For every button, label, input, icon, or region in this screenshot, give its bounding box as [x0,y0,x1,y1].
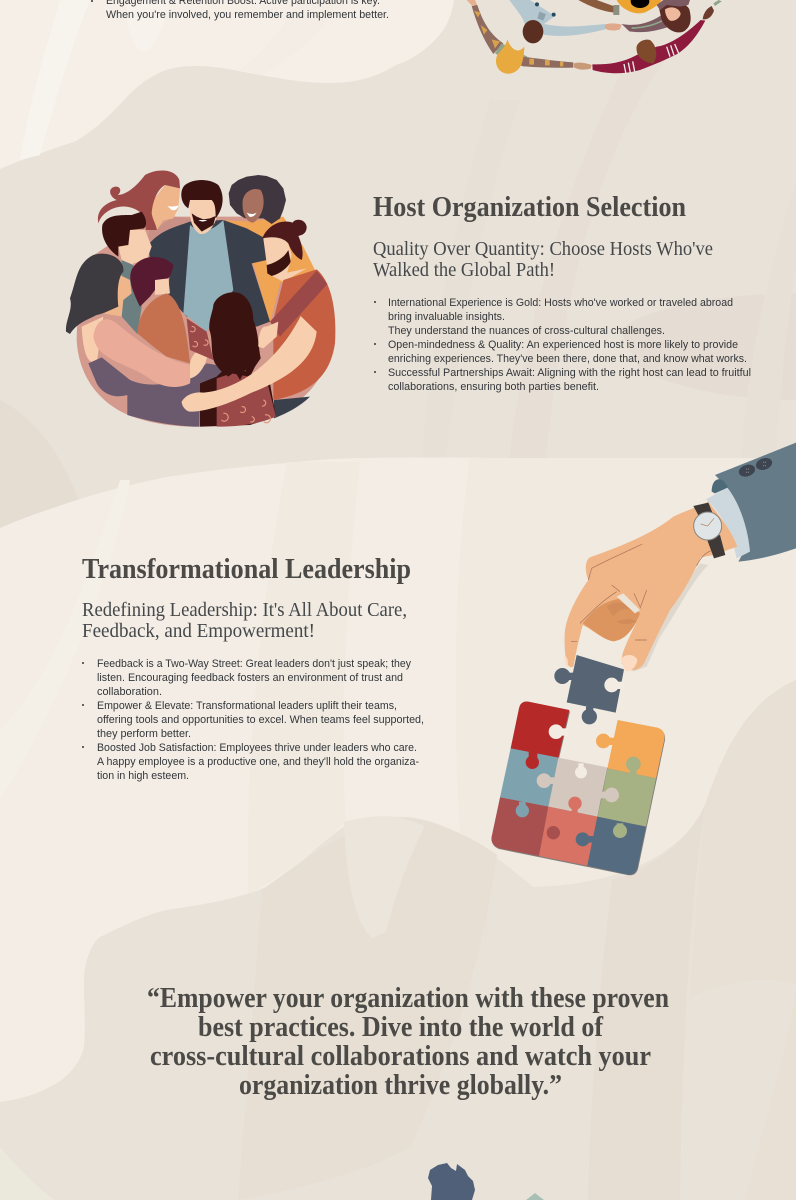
leadership sub-heading: Feedback, and Empowerment! [82,620,315,642]
host bullet list [374,297,751,393]
leadership bullet list: A happy employee is a productive one, and they'll hold the organiza- [97,756,419,768]
leadership bullet list: Boosted Job Satisfaction: Employees thrive under leaders who care. [97,742,417,754]
suit sleeve [715,443,796,562]
person in light blue shirt [509,0,622,43]
bottom figure: blue hair silhouette [428,1163,475,1200]
leadership bullet list: they perform better. [97,728,191,740]
bottom figure: sage hair silhouette [526,1193,544,1200]
woman with auburn hair [98,170,192,250]
lifted slate piece [554,655,624,724]
hand shadow [627,563,708,672]
green piece [597,768,656,827]
illustration: puzzle [491,655,665,875]
top section tail of bullet text: When you're involved, you remember and implement better. [106,9,389,21]
leadership bullet list: tion in high esteem. [97,770,189,782]
piece shadow [492,704,665,875]
closing quote: best practices. Dive into the world of [198,1012,604,1043]
puzzle notches [549,724,587,778]
illustration: hand placing a puzzle piece [564,443,796,672]
patterned skirt [187,318,213,360]
leadership heading: Transformational Leadership [82,553,411,585]
top section tail of bullet text [91,0,389,21]
leadership sub-heading: Redefining Leadership: It's All About Care, [82,599,407,621]
fingernails [621,655,637,671]
host sub-heading: Walked the Global Path! [373,259,555,281]
boy in profile [102,212,152,334]
host bullet list: Successful Partnerships Await: Aligning with the right host can lead to fruitful [388,367,751,379]
taupe piece [548,758,607,817]
woman with maroon hair and rust top [130,257,190,363]
hand and fingers [565,502,737,670]
shirt cuff [706,488,750,558]
maroon piece [491,797,548,856]
sleeve buttons [737,456,774,479]
lower beige blob [0,680,796,1200]
woman with long dark hair and patterned dress [200,292,276,427]
leadership bullet list: collaboration. [97,686,162,698]
leadership bullet list: Empower & Elevate: Transformational leaders uplift their teams, [97,700,397,712]
leadership bullet list: offering tools and opportunities to excel. When teams feel supported, [97,714,424,726]
light wedge [344,816,425,938]
host bullet list: Open-mindedness & Quality: An experienced host is more likely to provide [388,339,738,351]
curly hair woman [229,175,286,224]
illustration: people holding hands in a circle, seen from above [467,0,722,74]
person in patterned sleeves with blond hair [467,0,592,74]
orange sweater [220,217,315,323]
closing quote [147,983,669,1101]
leadership bullet list: Feedback is a Two-Way Street: Great leaders don't just speak; they [97,658,411,670]
host sub-heading [373,238,713,281]
host bullet list: collaborations, ensuring both parties benefit. [388,381,599,393]
arm hugging across the front [182,316,317,412]
host bullet list: bring invaluable insights. [388,311,505,323]
hand crease lines [571,544,711,641]
woman with dark wavy hair, pink top and friend's purple shirt [66,254,227,427]
leadership bullet list [82,658,424,782]
orange piece [607,720,665,778]
slate piece [587,817,646,875]
center man [148,180,270,332]
person in burgundy sweater [592,0,722,74]
man with top knot [262,220,335,418]
host heading: Host Organization Selection [373,191,686,223]
person in yellow [578,0,662,15]
host sub-heading: Quality Over Quantity: Choose Hosts Who've [373,238,713,260]
hand on shoulder [258,322,278,348]
coral piece [539,807,597,866]
woman in striped sweater [622,0,691,32]
red piece [511,702,569,758]
top-left cream blob [0,0,454,169]
closing quote: “Empower your organization with these proven [147,983,669,1014]
leadership bullet list: listen. Encouraging feedback fosters an environment of trust and [97,672,403,684]
host bullet list: They understand the nuances of cross-cultural challenges. [388,325,665,337]
teal piece [500,748,558,807]
middle cream band [0,458,796,1102]
back blob [77,217,333,427]
leadership sub-heading [82,599,407,642]
host bullet list: enriching experiences. They've been there, done that, and know what works. [388,353,747,365]
host bullet list: International Experience is Gold: Hosts who've worked or traveled abroad [388,297,733,309]
shadowed palm [583,598,640,641]
closing quote: cross-cultural collaborations and watch your [150,1041,651,1072]
illustration: group of friends hugging [66,170,335,427]
watch [693,503,725,558]
closing quote: organization thrive globally.” [239,1070,562,1101]
